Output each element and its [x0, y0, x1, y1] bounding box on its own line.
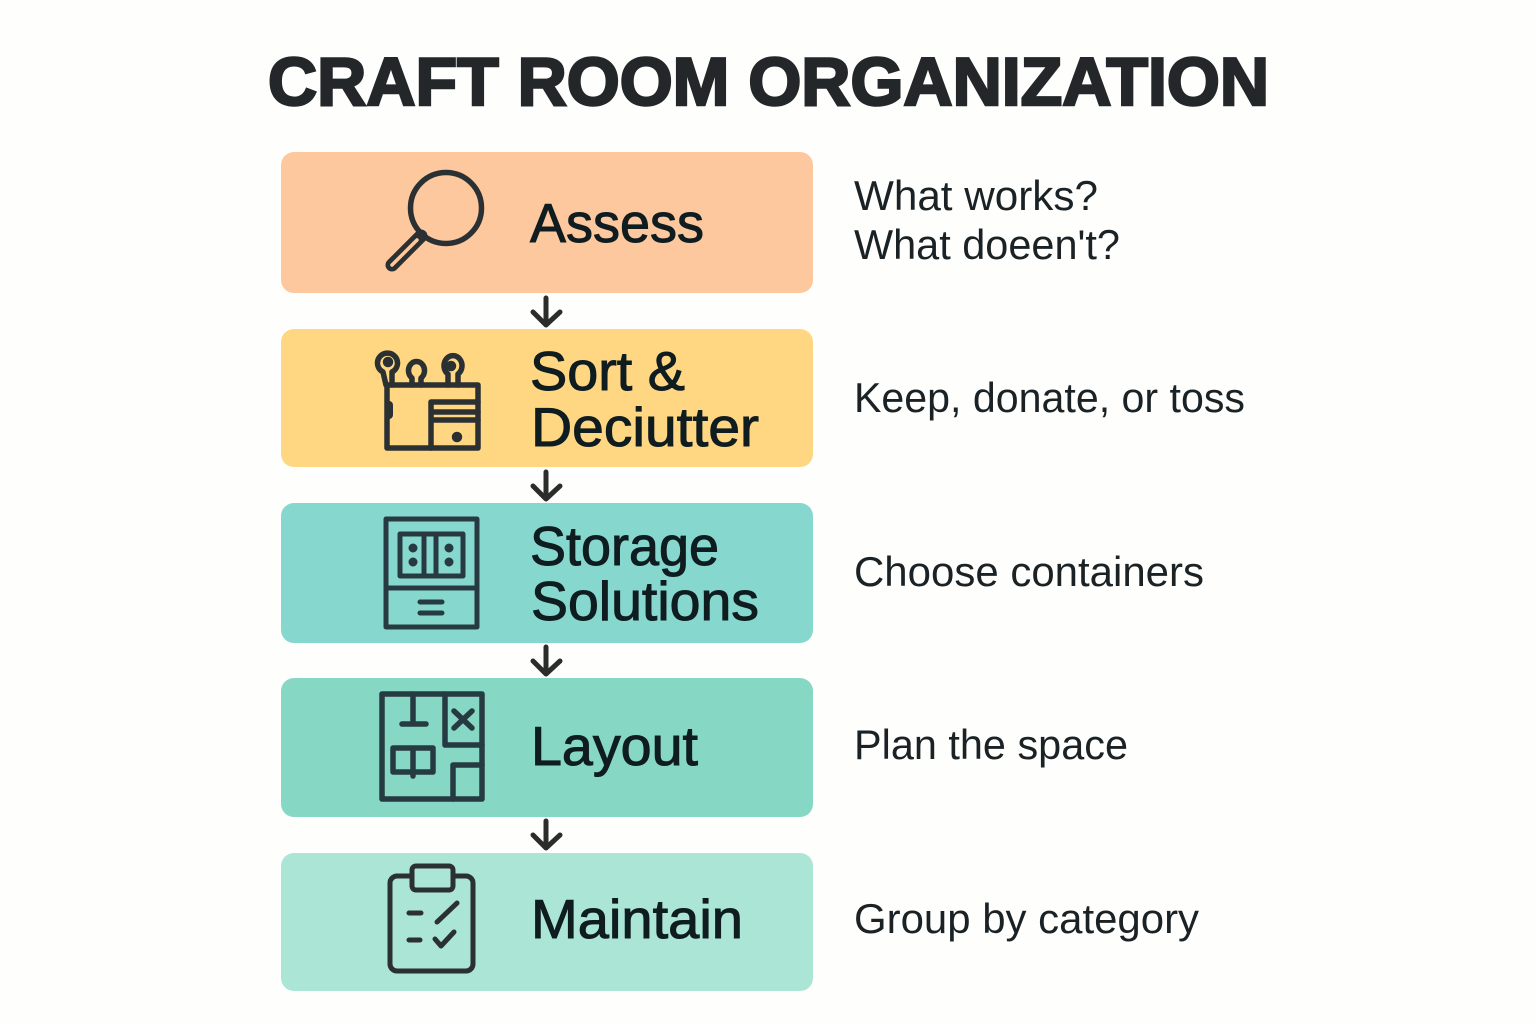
description: maintain: Group by category — [854, 895, 1199, 942]
panel: layout — [281, 678, 813, 817]
icon: magnifying glass — [392, 172, 482, 265]
arrow: sort to storage — [533, 472, 560, 499]
description: sort: Keep, donate, or toss — [854, 374, 1245, 421]
label: layout: Layout — [531, 715, 698, 777]
description: assess: What works? — [854, 172, 1098, 219]
description: assess — [854, 172, 1120, 268]
arrow: layout to maintain — [533, 821, 560, 848]
panel: sort and declutter — [281, 329, 813, 467]
description: layout: Plan the space — [854, 721, 1128, 768]
arrow: assess to sort — [533, 298, 560, 325]
panel: sort and declutter: Deciutter — [531, 396, 759, 458]
panel: storage solutions: Solutions — [531, 570, 759, 632]
arrow: storage to layout — [533, 647, 560, 674]
icon: storage cabinet — [386, 519, 477, 627]
panel: assess — [281, 152, 813, 293]
label: maintain: Maintain — [531, 888, 743, 950]
panel: storage solutions — [281, 503, 813, 643]
icon: clipboard checklist — [390, 866, 473, 971]
title: CRAFT ROOM ORGANIZATION — [268, 44, 1269, 120]
panel: maintain — [281, 853, 813, 991]
description: storage: Choose containers — [854, 548, 1204, 595]
description: assess: What doeen't? — [854, 221, 1120, 268]
label: storage solutions: Storage — [530, 515, 719, 577]
icon: floor plan — [382, 694, 482, 799]
label: sort and declutter: Sort & — [530, 340, 685, 402]
label: assess: Assess — [530, 192, 704, 254]
icon: craft caddy — [378, 353, 478, 448]
